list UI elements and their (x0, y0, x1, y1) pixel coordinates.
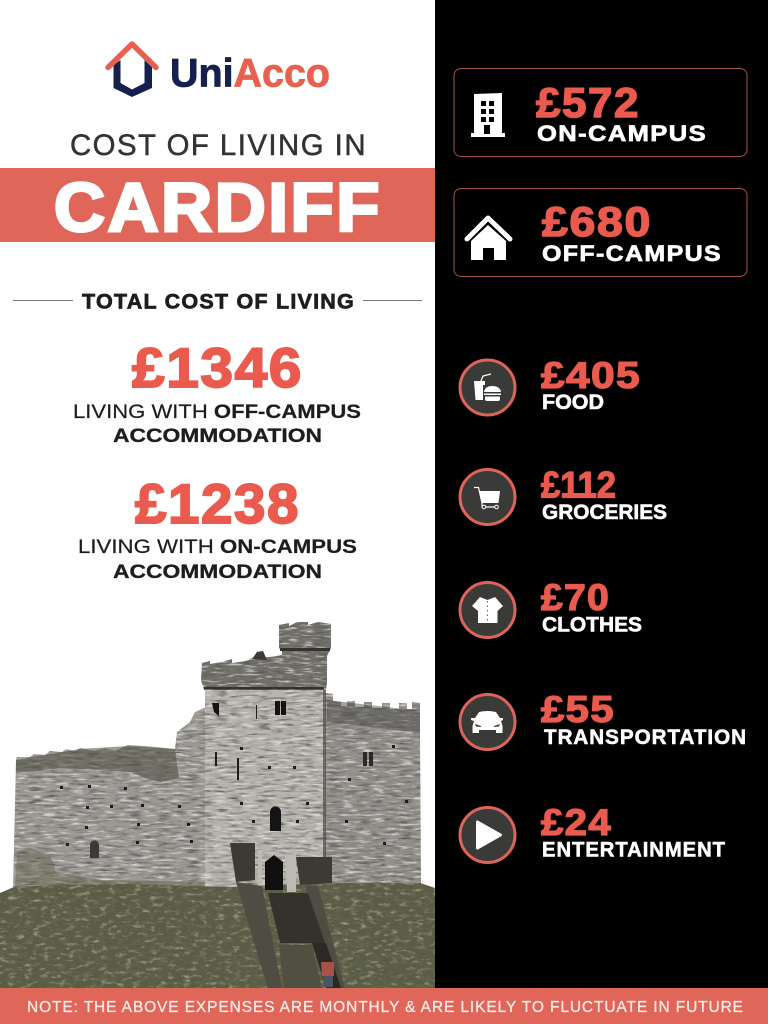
logo: UniAcco (108, 44, 330, 97)
expense: food (460, 355, 641, 415)
stat: off-campus total: £1346 (132, 336, 303, 399)
doorway (265, 855, 283, 890)
stat: on-campus total: LIVING WITH ON-CAMPUS (78, 537, 357, 558)
footer note bar (0, 988, 768, 1024)
icon: car (460, 694, 515, 750)
stat: off-campus total: LIVING WITH OFF-CAMPUS (73, 402, 361, 423)
expense: groceries: GROCERIES (542, 501, 667, 524)
card: off-campus: £680 (542, 198, 652, 245)
logo wordmark: UniAcco (170, 52, 330, 96)
expense: clothes: CLOTHES (542, 614, 642, 636)
illustration: Cardiff castle on hill (0, 622, 435, 989)
stat: on-campus total (78, 472, 357, 583)
icon: building (471, 93, 505, 137)
card: on-campus: £572 (536, 79, 640, 126)
tower edge shadow (323, 690, 326, 880)
right wall top shading (327, 700, 420, 733)
castle central tower (205, 686, 325, 890)
expense: entertainment (460, 802, 726, 862)
castle right wall (315, 692, 421, 892)
card: on-campus (454, 68, 747, 156)
panel: left white column (0, 0, 435, 1024)
expense: transportation (460, 689, 747, 750)
icon: drink and burger (460, 360, 515, 415)
banner: Cardiff: CARDIFF (54, 169, 382, 246)
expense: transportation: TRANSPORTATION (544, 726, 747, 749)
left wall vegetation (15, 848, 205, 888)
left wall upper moss shading (16, 746, 179, 782)
expense: entertainment: £24 (541, 802, 612, 843)
expense: groceries: £112 (541, 464, 616, 506)
stat: off-campus total (73, 336, 361, 447)
tower windows and doors (90, 701, 373, 858)
stat: on-campus total: £1238 (135, 472, 300, 535)
panel: right black column (435, 0, 768, 988)
icon: house (467, 218, 510, 260)
expense: entertainment: ENTERTAINMENT (542, 838, 726, 862)
figures on tower (252, 651, 267, 660)
turret band (280, 648, 330, 651)
expense: clothes: £70 (541, 577, 610, 618)
expense: clothes (460, 577, 642, 638)
icon: house logo mark (108, 44, 156, 97)
tower crown (201, 622, 331, 690)
card: off-campus (454, 188, 747, 276)
stat: off-campus total: ACCOMMODATION (113, 426, 322, 447)
card: off-campus: OFF-CAMPUS (542, 241, 722, 266)
expense: food: FOOD (542, 391, 604, 414)
card: on-campus: ON-CAMPUS (537, 121, 707, 146)
expense: food: £405 (541, 355, 641, 396)
stat: on-campus total: ACCOMMODATION (113, 562, 322, 583)
stairs and buttresses (230, 843, 345, 989)
ground hill (0, 883, 435, 989)
crown shading line (204, 687, 324, 690)
expense: groceries (460, 464, 667, 524)
castle left wall (13, 708, 215, 892)
icon: play button (460, 808, 515, 862)
icon: shirt (460, 582, 515, 638)
icon: shopping cart (460, 470, 515, 524)
section heading: total cost of living: TOTAL COST OF LIVING (82, 290, 355, 314)
wall arrow slits (60, 705, 408, 846)
heading: cost of living in: COST OF LIVING IN (70, 129, 367, 162)
expense: transportation: £55 (541, 689, 615, 730)
footer note bar: NOTE: THE ABOVE EXPENSES ARE MONTHLY & ARE LIKELY TO FLUCTUATE IN FUTURE (27, 999, 743, 1016)
